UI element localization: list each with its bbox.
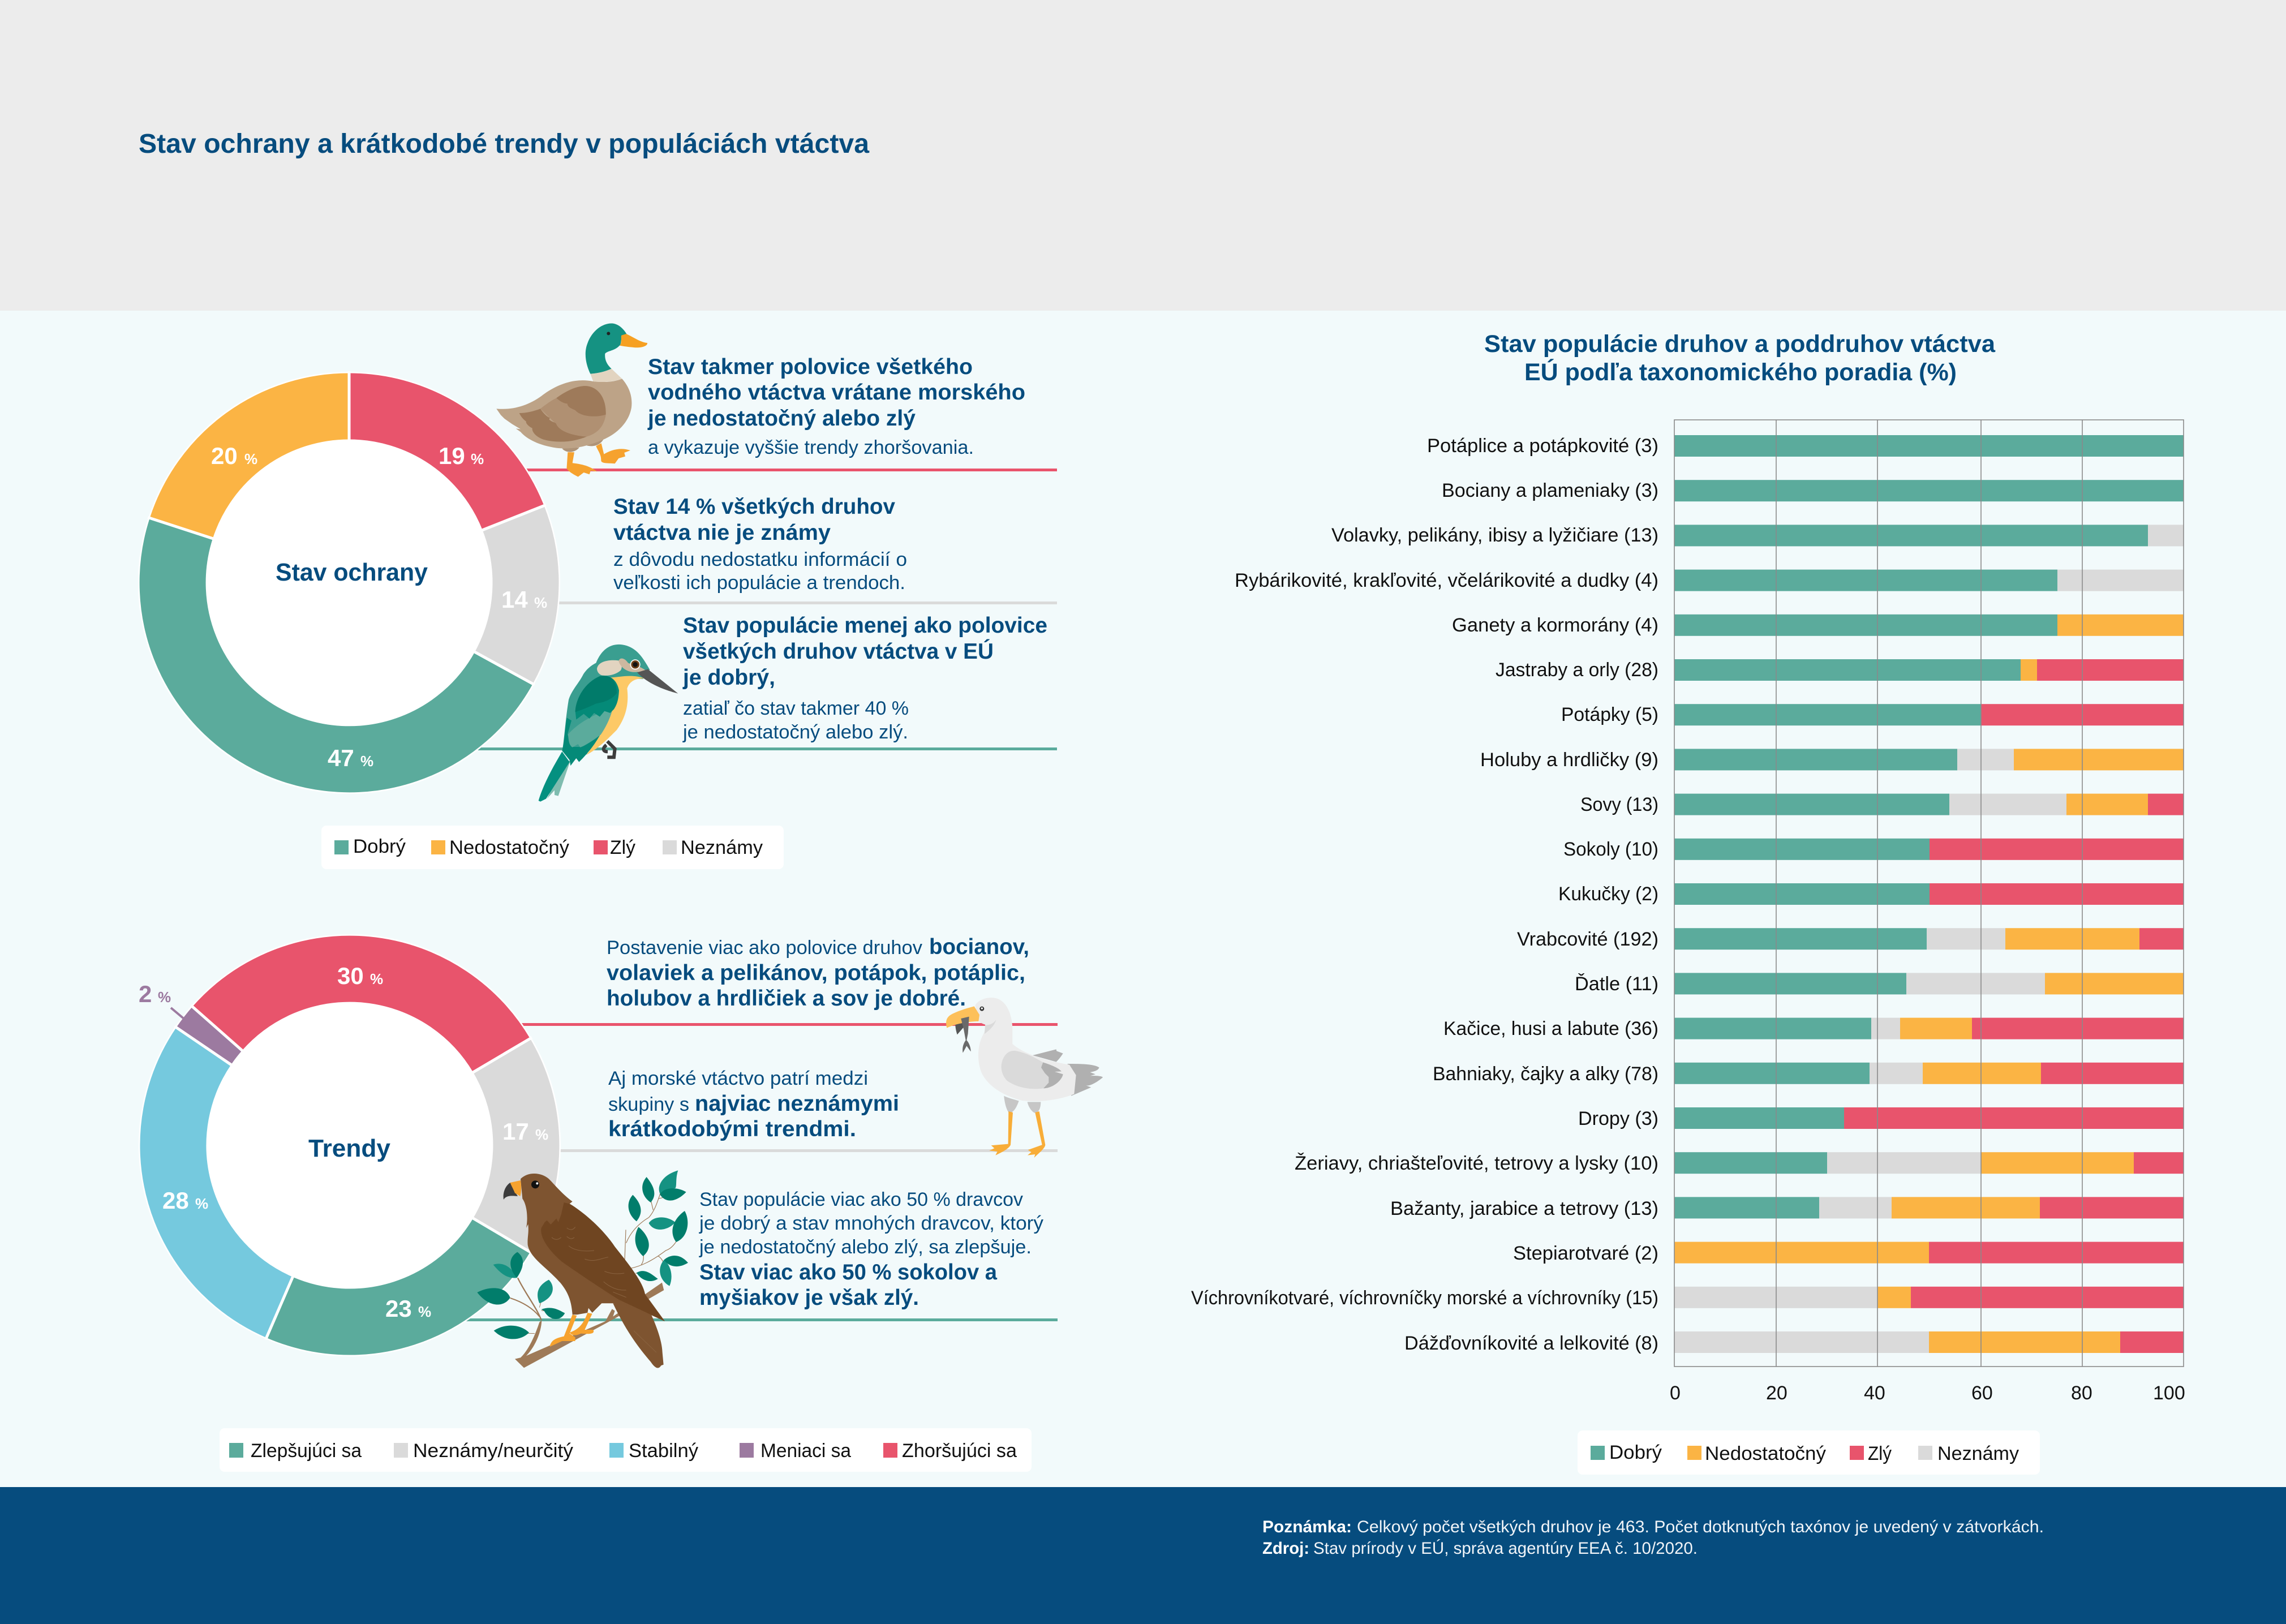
value: 20 %: %: [244, 450, 257, 467]
text block: seabirds: skupiny s: [608, 1094, 689, 1115]
segment: Stabilný 28 %: [173, 1046, 280, 1307]
row labels: Dropy (3): [1578, 1108, 1658, 1129]
value: 17 %: 17: [502, 1118, 529, 1145]
text block: good status: Stav populácie menej ako polovice: [683, 613, 1047, 638]
row labels: Holuby a hrdličky (9): [1480, 749, 1658, 771]
row labels: Ďatle (11): [1575, 973, 1658, 995]
header band: [0, 0, 2286, 311]
donut chart: Trendy: [139, 934, 561, 1356]
axis labels: 0: [1670, 1382, 1681, 1404]
row labels: Volavky, pelikány, ibisy a lyžičiare (13): [1331, 525, 1658, 546]
text block: seabirds: [608, 1068, 899, 1141]
value: 2 % with leader: %: [158, 989, 171, 1006]
text block: unknown status: Stav 14 % všetkých druhov: [613, 495, 895, 519]
legend: conservation status: Neznámy: [681, 837, 763, 858]
text block: unknown status: [613, 495, 907, 594]
value: 17 %: [502, 1118, 548, 1145]
text block: storks and herons: bocianov,: [929, 935, 1029, 959]
legend: bar chart: [1578, 1430, 2040, 1475]
value: 14 %: %: [534, 594, 547, 611]
legend: bar chart: Dobrý: [1609, 1442, 1662, 1463]
value: 30 %: [337, 963, 383, 989]
text block: seabirds: krátkodobými trendmi.: [608, 1117, 856, 1141]
axis labels: 40: [1864, 1382, 1885, 1404]
row labels: Vrabcovité (192): [1517, 929, 1658, 950]
leaves: [477, 1170, 688, 1339]
text block: raptors: Stav populácie viac ako 50 % dravcov: [699, 1189, 1023, 1210]
axis labels: 60: [1971, 1382, 1993, 1404]
row labels: Rybárikovité, krakľovité, včelárikovité a dudky (4): [1235, 570, 1658, 591]
legend: conservation status: Dobrý: [353, 836, 406, 857]
segment: Zhoršujúci sa 30 %: [217, 969, 501, 1055]
stacked bar chart: [1191, 420, 2185, 1404]
icon: seagull with fish: [946, 998, 1103, 1158]
text block: water birds: [647, 355, 1025, 458]
segment: Neznámy 14 %: [504, 518, 526, 668]
text block: water birds: Stav takmer polovice všetkého: [648, 355, 973, 379]
footer note and source: Zdroj:: [1262, 1539, 1309, 1558]
segment: Nedostatočný 20 %: [181, 406, 349, 529]
axis labels: [1670, 1382, 2185, 1404]
text block: unknown status: vtáctva nie je známy: [613, 521, 831, 545]
value: 23 %: 23: [385, 1295, 412, 1322]
text block: water birds: je nedostatočný alebo zlý: [647, 406, 916, 431]
bar chart heading: [1484, 330, 1996, 386]
text block: good status: všetkých druhov vtáctva v EÚ: [683, 639, 994, 664]
text block: good status: je nedostatočný alebo zlý.: [682, 721, 908, 743]
row labels: Bociany a plameniaky (3): [1442, 480, 1658, 501]
value: 28 %: 28: [162, 1187, 189, 1214]
axis labels: 20: [1766, 1382, 1787, 1404]
legend: trends: [220, 1428, 1032, 1472]
row labels: Kačice, husi a labute (36): [1443, 1018, 1658, 1039]
footer note and source: Stav prírody v EÚ, správa agentúry EEA č. 10/2020.: [1313, 1539, 1698, 1558]
legend: trends: Zhoršujúci sa: [902, 1440, 1017, 1462]
row labels: [1191, 435, 1658, 1354]
value: 14 %: 14: [501, 586, 528, 613]
footer note and source: [1262, 1518, 2044, 1558]
segment: Zlepšujúci sa 23 %: [280, 1235, 501, 1322]
axis labels: 100: [2153, 1382, 2185, 1404]
footer band: [0, 1487, 2286, 1624]
callout leader lines: conservation status: [478, 469, 1057, 750]
value: 23 %: %: [418, 1303, 431, 1320]
axis labels: 80: [2071, 1382, 2092, 1404]
legend: conservation status: Zlý: [610, 837, 635, 858]
row labels: Sokoly (10): [1563, 839, 1658, 860]
text block: unknown status: z dôvodu nedostatku informácií o: [613, 549, 907, 570]
text block: unknown status: veľkosti ich populácie a trendoch.: [613, 572, 905, 594]
legend: conservation status: Nedostatočný: [449, 837, 569, 858]
value: 28 %: [162, 1187, 208, 1214]
value: 30 %: 30: [337, 963, 364, 989]
value: 30 %: %: [370, 970, 383, 987]
row labels: Sovy (13): [1580, 794, 1658, 815]
legend: trends: Neznámy/neurčitý: [413, 1440, 573, 1462]
text block: seabirds: najviac neznámymi: [695, 1092, 899, 1116]
bar chart heading: EÚ podľa taxonomického poradia (%): [1524, 358, 1957, 386]
text block: water birds: a vykazuje vyššie trendy zhoršovania.: [648, 437, 974, 458]
center label: Trendy: [308, 1135, 391, 1162]
legend: conservation status: [321, 826, 784, 869]
legend: trends: Meniaci sa: [760, 1440, 851, 1462]
bars: [1674, 435, 2184, 1353]
value: 2 % with leader: [139, 981, 185, 1020]
text block: water birds: vodného vtáctva vrátane morského: [648, 380, 1025, 405]
value: 20 %: [211, 442, 257, 469]
value: 47 %: %: [360, 753, 373, 770]
row labels: Potápky (5): [1561, 704, 1658, 725]
text block: raptors: [699, 1189, 1043, 1310]
text block: storks and herons: [607, 935, 1029, 1011]
text block: raptors: je nedostatočný alebo zlý, sa zlepšuje.: [699, 1236, 1032, 1258]
value: 47 %: [328, 745, 373, 771]
icon: kingfisher: [539, 645, 678, 802]
text block: good status: zatiaľ čo stav takmer 40 %: [683, 698, 909, 719]
text block: raptors: myšiakov je však zlý.: [699, 1286, 919, 1310]
text block: seabirds: Aj morské vtáctvo patrí medzi: [608, 1068, 868, 1089]
title: Stav ochrany a krátkodobé trendy v populáciách vtáctva: [139, 129, 869, 159]
text block: storks and herons: volaviek a pelikánov, potápok, potáplic,: [607, 961, 1025, 985]
callout leader lines: trends: [463, 1023, 1058, 1321]
text block: storks and herons: Postavenie viac ako polovice druhov: [607, 937, 922, 959]
row labels: Dážďovníkovité a lelkovité (8): [1404, 1333, 1658, 1354]
segment: Neznámy/neurčitý 17 %: [501, 1055, 526, 1235]
value: 14 %: [501, 586, 547, 613]
row labels: Jastraby a orly (28): [1496, 659, 1658, 681]
row labels: Potáplice a potápkovité (3): [1427, 435, 1658, 457]
footer note and source: Poznámka:: [1262, 1518, 1352, 1536]
value: 28 %: %: [195, 1195, 208, 1212]
icon: mallard duck: [496, 324, 647, 477]
center label: Stav ochrany: [276, 558, 428, 586]
value: 19 %: [439, 442, 484, 469]
text block: raptors: je dobrý a stav mnohých dravcov, ktorý: [699, 1213, 1043, 1234]
donut chart: Stav ochrany: [138, 371, 560, 794]
value: 19 %: 19: [439, 442, 465, 469]
value: 17 %: %: [535, 1126, 548, 1143]
text block: raptors: Stav viac ako 50 % sokolov a: [699, 1260, 997, 1284]
value: 47 %: 47: [328, 745, 354, 771]
row labels: Žeriavy, chriašteľovité, tetrovy a lysky (10): [1295, 1153, 1658, 1174]
segment: Zlý 19 %: [349, 406, 513, 518]
segment: Meniaci sa 2 %: [204, 1029, 217, 1046]
row labels: Kukučky (2): [1558, 883, 1658, 905]
value: 19 %: %: [471, 450, 484, 467]
row labels: Ganety a kormorány (4): [1452, 615, 1658, 636]
value: 2 % with leader: 2: [139, 981, 152, 1007]
segment: Dobrý 47 %: [173, 529, 504, 759]
value: 23 %: [385, 1295, 431, 1322]
row labels: Víchrovníkotvaré, víchrovníčky morské a víchrovníky (15): [1191, 1287, 1658, 1309]
legend: trends: Stabilný: [629, 1440, 698, 1462]
row labels: Stepiarotvaré (2): [1513, 1243, 1658, 1264]
legend: bar chart: Nedostatočný: [1705, 1443, 1826, 1464]
legend: bar chart: Zlý: [1868, 1443, 1892, 1464]
text block: good status: [682, 613, 1047, 743]
legend: trends: Zlepšujúci sa: [251, 1440, 362, 1462]
text block: storks and herons: holubov a hrdličiek a sov je dobré.: [607, 986, 966, 1011]
row labels: Bažanty, jarabice a tetrovy (13): [1390, 1198, 1658, 1219]
text block: good status: je dobrý,: [682, 665, 775, 690]
value: 20 %: 20: [211, 442, 238, 469]
bar chart heading: Stav populácie druhov a poddruhov vtáctva: [1484, 330, 1996, 358]
footer note and source: Celkový počet všetkých druhov je 463. Počet dotknutých taxónov je uvedený v zátvorkách.: [1357, 1518, 2044, 1536]
row labels: Bahniaky, čajky a alky (78): [1433, 1063, 1658, 1085]
legend: bar chart: Neznámy: [1937, 1443, 2019, 1464]
icon: hawk on branch: [477, 1170, 688, 1368]
